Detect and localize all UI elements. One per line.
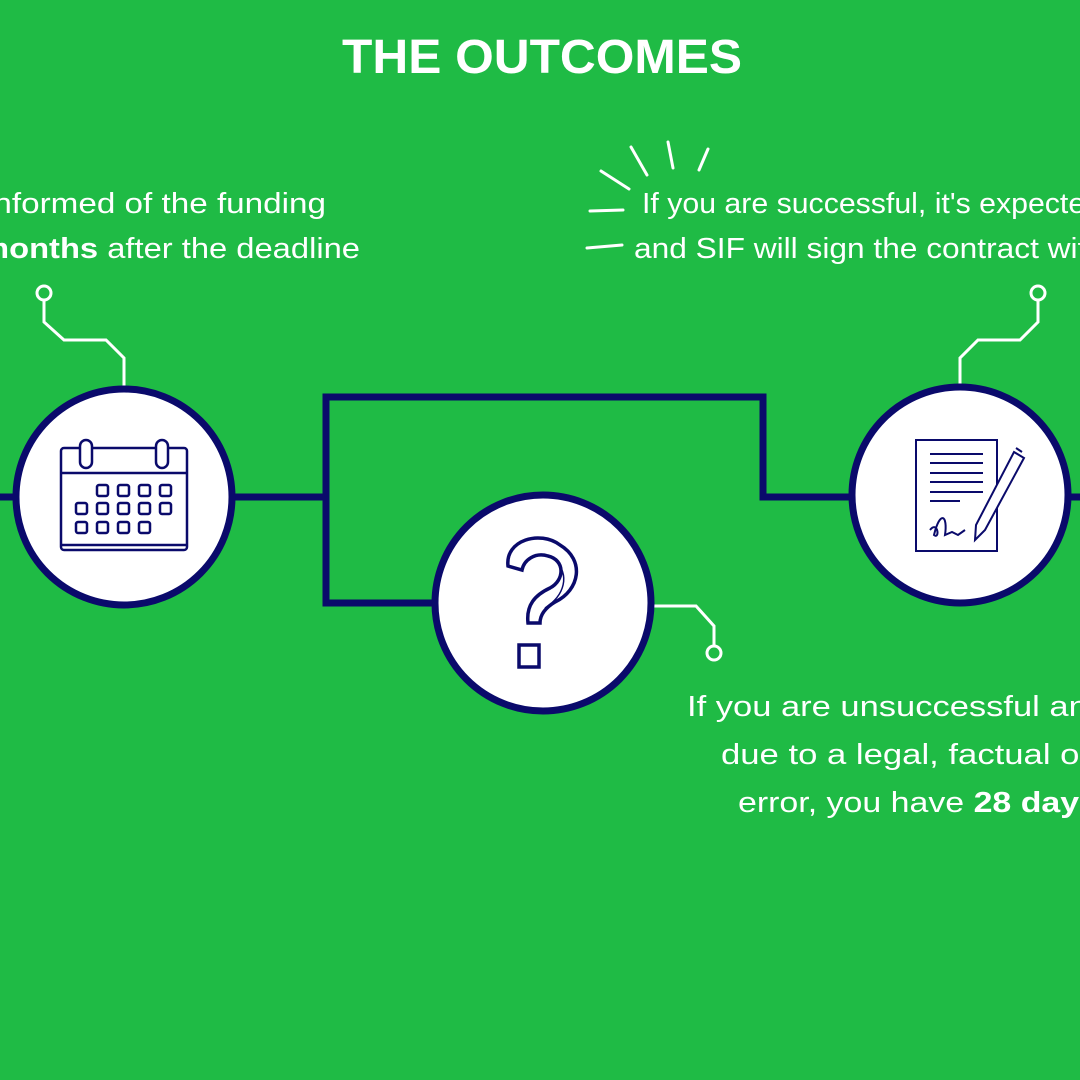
icon: signed document xyxy=(852,387,1068,603)
text: successful outcome: and SIF will sign the contract with xyxy=(634,233,1080,265)
icon: calendar xyxy=(16,389,232,605)
sparkle lines xyxy=(587,142,708,248)
text: successful outcome xyxy=(634,188,1080,265)
white callout connectors xyxy=(37,286,1045,660)
icon: question mark xyxy=(435,495,651,711)
text: successful outcome: If you are successful, it's expected xyxy=(642,188,1080,220)
text: unsuccessful outcome xyxy=(687,691,1080,819)
navy connector lines xyxy=(0,397,1080,603)
text: unsuccessful outcome: error, you have 28 days xyxy=(738,787,1080,819)
title: THE OUTCOMES xyxy=(342,31,742,84)
text: unsuccessful outcome: If you are unsuccessful and xyxy=(687,691,1080,723)
text: funding timing xyxy=(0,188,360,265)
text: unsuccessful outcome: due to a legal, factual or xyxy=(721,739,1080,771)
